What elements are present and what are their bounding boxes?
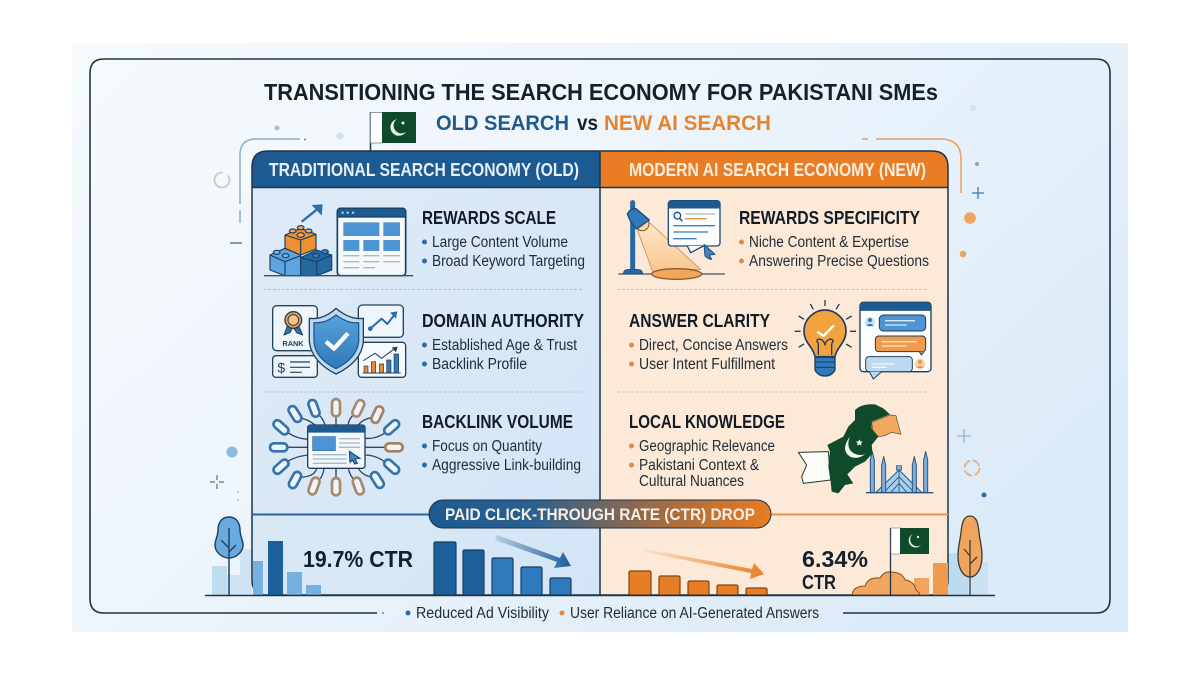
stat: 6.34% CTR: CTR [802, 572, 836, 594]
icon: bush with flag [852, 528, 929, 595]
text: local knowledge [629, 412, 785, 490]
arrow: old decline [495, 535, 571, 568]
small bar chart left [253, 541, 321, 595]
footer legend: User Reliance on AI-Generated Answers [570, 605, 819, 622]
text: backlink volume: BACKLINK VOLUME [422, 412, 573, 432]
icon: rank, shield and analytics [273, 305, 406, 377]
icon: building blocks and page [264, 204, 413, 276]
text: rewards scale: REWARDS SCALE [422, 208, 556, 228]
panel header: new: MODERN AI SEARCH ECONOMY (NEW) [629, 160, 926, 180]
footer legend: Reduced Ad Visibility [416, 605, 549, 622]
skyline right background [948, 553, 988, 595]
text: rewards specificity: Niche Content & Expertise [749, 234, 909, 251]
text: answer clarity [629, 311, 788, 373]
icon: spotlight on answer [618, 201, 725, 279]
text: backlink volume [422, 412, 581, 474]
text: rewards scale [422, 208, 585, 270]
text: rewards specificity [739, 208, 929, 270]
icon: Pakistan map [798, 404, 901, 493]
text: local knowledge: Cultural Nuances [639, 473, 744, 490]
text: rewards scale: Large Content Volume [432, 234, 568, 251]
section divider: CTR [252, 514, 948, 516]
footer legend [406, 605, 819, 622]
panel header: old [252, 151, 600, 187]
panel header: new [600, 151, 948, 187]
icon: rank, shield and analytics: $ [277, 359, 285, 375]
text: backlink volume: Focus on Quantity [432, 438, 542, 455]
text: domain authority: Backlink Profile [432, 356, 527, 373]
text: rewards specificity: REWARDS SPECIFICITY [739, 208, 920, 228]
skyline left background [212, 549, 252, 595]
panel: traditional search economy [252, 151, 600, 595]
stat: 19.7% CTR: 19.7% CTR [303, 546, 413, 572]
subtitle: NEW AI SEARCH [604, 111, 771, 135]
icon: light bulb [795, 300, 856, 376]
title: TRANSITIONING THE SEARCH ECONOMY FOR PAKISTANI SMEs [264, 79, 938, 105]
text: answer clarity: User Intent Fulfillment [639, 356, 776, 373]
text: local knowledge: Pakistani Context & [639, 457, 760, 474]
subtitle [436, 111, 771, 135]
text: domain authority: Established Age & Trust [432, 337, 578, 354]
callout: paid CTR drop [429, 500, 771, 528]
small bars right [914, 563, 948, 595]
callout: paid CTR drop: PAID CLICK-THROUGH RATE (CTR) DROP [445, 505, 755, 524]
panel: modern AI search economy [600, 151, 948, 595]
background [72, 43, 1128, 632]
bar chart: new CTR decline [629, 571, 767, 595]
outer frame [90, 59, 1110, 613]
bar chart: old CTR decline [434, 542, 571, 595]
panel outline [252, 151, 948, 595]
arrow: new decline [644, 549, 764, 579]
icon: tree right [958, 516, 982, 595]
text: local knowledge: LOCAL KNOWLEDGE [629, 412, 785, 432]
stat: 6.34% CTR: 6.34% [802, 546, 868, 572]
panel header: old: TRADITIONAL SEARCH ECONOMY (OLD) [269, 160, 579, 180]
text: rewards specificity: Answering Precise Questions [749, 253, 929, 270]
subtitle: OLD SEARCH [436, 111, 569, 135]
icon: rank, shield and analytics: RANK [282, 339, 304, 348]
text: answer clarity: Direct, Concise Answers [639, 337, 788, 354]
icon: backlink network [270, 399, 403, 496]
text: backlink volume: Aggressive Link-building [432, 457, 581, 474]
text: rewards scale: Broad Keyword Targeting [432, 253, 585, 270]
text: local knowledge: Geographic Relevance [639, 438, 775, 455]
icon: Pakistan flag on pole [370, 112, 416, 152]
decorative accents right [382, 104, 986, 614]
text: domain authority [422, 311, 584, 373]
subtitle: vs [577, 111, 598, 135]
stat: 6.34% CTR [802, 546, 868, 594]
icon: Faisal mosque [866, 452, 933, 493]
icon: chat window [860, 302, 931, 379]
icon: tree left [215, 517, 243, 595]
decorative accents left [210, 126, 344, 501]
text: domain authority: DOMAIN AUTHORITY [422, 311, 584, 331]
ground line [205, 594, 995, 596]
text: answer clarity: ANSWER CLARITY [629, 311, 770, 331]
